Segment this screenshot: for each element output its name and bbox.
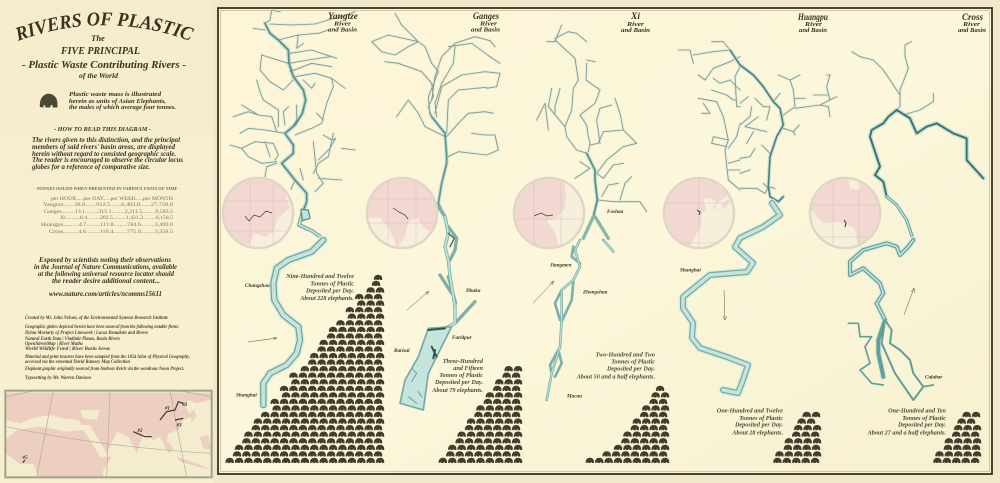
text block: source paper xyxy=(34,256,177,298)
text block: source paper: in the Journal of Nature Communications, available xyxy=(34,263,177,271)
text block: credits: Created by Mr. John Nelson, of the Environmental Systems Research Institute xyxy=(25,316,169,321)
river title: Ganges: and Basin xyxy=(471,26,501,34)
tonnage note: Cross xyxy=(867,408,947,436)
text block: how to read: The reader is encouraged to observe the circular locus xyxy=(32,157,183,164)
globe: Huangpu xyxy=(664,178,734,248)
river title: Cross: Cross xyxy=(962,13,983,23)
locator map: #4 xyxy=(181,403,187,408)
tonnage note: Cross: About 27 and a half elephants. xyxy=(867,430,946,436)
text block: credits: World Wildlife Fund | River Basin Areas xyxy=(25,347,110,352)
icon: elephant unit xyxy=(40,94,57,108)
globe: Xi xyxy=(514,178,584,248)
river title: Yangtze xyxy=(328,12,359,34)
river title: Yangtze: and Basin xyxy=(328,26,358,34)
river title: Xi xyxy=(621,12,651,34)
river title: Yangtze: Yangtze xyxy=(328,12,359,22)
river title: Huangpu: River xyxy=(804,21,823,28)
panel: river basins frame xyxy=(213,0,1000,483)
text block: credits: OpenStreetMap | River Maths xyxy=(25,342,83,347)
river title: Huangpu: Huangpu xyxy=(797,13,828,23)
title: RIVERS OF PLASTIC xyxy=(16,12,194,41)
text block: credits: Geographic globes depicted herein have been sourced from the following notable firms: xyxy=(25,325,179,330)
river: Yangtze xyxy=(230,10,355,405)
legend text: Plastic waste mass is illustrated xyxy=(69,91,162,98)
text block: credits: Elephant graphic originally sourced from Andreas Reich via the wondrous Noun Project. xyxy=(24,367,184,372)
city labels: Shanghai xyxy=(680,268,701,274)
river title: Ganges: Ganges xyxy=(473,12,499,22)
river: Cross xyxy=(848,42,983,400)
text block: credits: Natural Earth Data | Vladimir Plazas, Basin Rivers xyxy=(24,337,120,342)
text block: how to read: The rivers given to this distinction, and the principal xyxy=(32,137,180,144)
tonnage note: Yangtze: Deposited per Day. xyxy=(305,288,354,294)
river title: Xi: Xi xyxy=(630,12,640,22)
table: tonnes per unit of time: Huangpu..........4.7.........111.8.........784.6.........3,400.0 xyxy=(41,222,173,228)
city labels: Jiangmen xyxy=(549,262,571,268)
tonnage note: Ganges: Three-Hundred xyxy=(443,358,484,365)
legend text: herein as units of Asian Elephants, xyxy=(69,98,166,105)
table: tonnes per unit of time: Cross..........4.6.........110.4.........775.0.........3,358.5 xyxy=(49,229,173,235)
elephant pyramid: Huangpu xyxy=(773,412,821,463)
text block: how to read xyxy=(31,137,183,171)
tonnage note: Cross: Tonnes of Plastic xyxy=(902,415,946,422)
elephant pyramid: Ganges xyxy=(439,366,522,463)
tonnage note: Huangpu: Tonnes of Plastic xyxy=(739,415,783,422)
text block: credits: Dylan Moriarty of Project Linework | Lucas Beaudoin and Rivers xyxy=(24,331,148,336)
tonnage note: Huangpu: One-Hundred and Twelve xyxy=(717,408,783,414)
locator map: #2 xyxy=(136,429,143,434)
river title: Cross: and Basin xyxy=(958,27,987,34)
tonnage note: Ganges: Deposited per Day. xyxy=(434,379,483,386)
city labels: Foshan xyxy=(607,209,624,215)
subtitle: of the World xyxy=(79,72,119,80)
city labels: Calabar xyxy=(925,374,943,380)
subtitle xyxy=(22,33,186,80)
river title: Huangpu: and Basin xyxy=(799,27,828,34)
river title: Huangpu xyxy=(797,13,828,34)
callout and elephants: Cross xyxy=(867,408,981,463)
tonnage note: Ganges: Tonnes of Plastic xyxy=(439,372,483,379)
elephant pyramid: Cross xyxy=(933,412,981,463)
tonnage note: Xi: About 50 and a half elephants. xyxy=(576,374,655,380)
text block: source paper: at the following universal resource locator should xyxy=(38,270,174,278)
tonnage note: Huangpu: About 28 elephants. xyxy=(731,430,783,436)
elephant pyramid: Yangtze xyxy=(225,275,384,463)
tonnage note: Xi: Deposited per Day. xyxy=(606,366,655,372)
city labels xyxy=(236,209,943,400)
river title: Cross xyxy=(958,13,987,34)
river: Ganges xyxy=(372,13,500,410)
subtitle: FIVE PRINCIPAL xyxy=(60,46,140,57)
river: Xi xyxy=(537,25,647,400)
heading: how to read: - HOW TO READ THIS DIAGRAM - xyxy=(54,127,151,133)
legend text xyxy=(69,91,176,111)
text block: source paper: www.nature.com/articles/ncomms15611 xyxy=(49,289,162,298)
table: tonnes per unit of time: Xi..........8.4.........202.5.........1,421.2.........6,158.5 xyxy=(60,215,173,221)
callout and elephants: Huangpu xyxy=(717,408,821,463)
tonnage note: Xi: Tonnes of Plastic xyxy=(611,358,655,366)
text block: how to read: members of said rivers' basin areas, are displayed xyxy=(32,144,176,151)
city labels: Macau xyxy=(566,394,582,400)
text block: how to read: herein without regard to consisted geographic scale. xyxy=(32,151,176,158)
tonnage note: Huangpu: Deposited per Day. xyxy=(734,422,783,428)
tonnage note: Yangtze xyxy=(285,273,354,302)
tonnage note: Ganges xyxy=(431,358,484,394)
table: tonnes per unit of time: Yangtze.......38.0.......912.5.......6,403.8.......27,750.0 xyxy=(43,202,173,208)
locator map: #5 xyxy=(22,456,28,461)
river title: Ganges xyxy=(471,12,501,34)
legend text: the males of which average four tonnes. xyxy=(69,104,176,111)
text block: credits: accessed via the esteemed David Rumsey Map Collection xyxy=(25,360,130,365)
elephant pyramid: Xi xyxy=(586,386,669,463)
panel: title and reading guide xyxy=(0,12,213,483)
text block: source paper: the reader desire additional content... xyxy=(52,277,160,285)
river title: Ganges: River xyxy=(479,20,498,28)
city labels: Dhaka xyxy=(465,288,481,294)
river title: Cross: River xyxy=(962,21,981,28)
north arrows xyxy=(248,281,915,342)
city labels: Changzhou xyxy=(245,283,270,289)
locator map: #3 xyxy=(176,424,182,429)
globe: Cross xyxy=(810,178,880,248)
tonnage note: Cross: Deposited per Day. xyxy=(897,422,946,428)
river title: Xi: River xyxy=(626,21,645,28)
river title: Yangtze: River xyxy=(333,20,352,28)
tonnage note: Yangtze: About 228 elephants. xyxy=(299,295,354,302)
city labels: Shanghai xyxy=(236,392,257,398)
globe: Yangtze xyxy=(223,178,293,248)
subtitle: - Plastic Waste Contributing Rivers - xyxy=(22,59,186,71)
globe: Ganges xyxy=(367,178,437,248)
tonnage note: Xi: Two-Hundred and Two xyxy=(596,352,655,358)
heading: tonnes table: - TONNES ISSUED WHEN PRESENTED IN VARIOUS UNITS OF TIME - xyxy=(34,186,181,191)
text block: how to read: globes for a reference of comparative size. xyxy=(31,164,150,171)
text block: source paper: Exposed by scientists noting their observations xyxy=(38,256,171,264)
tonnage note: Yangtze: Tonnes of Plastic xyxy=(310,280,354,288)
locator map: #1 xyxy=(164,406,170,411)
river title: Xi: and Basin xyxy=(621,27,651,34)
table: tonnes per unit of time: per HOUR.....per DAY.....per WEEK.....per MONTH xyxy=(51,196,173,202)
tonnage note: Cross: One-Hundred and Ten xyxy=(888,408,947,414)
text block: credits: Material and print textures have been sampled from the 1854 Atlas of Physical Geography, xyxy=(24,355,190,360)
city labels: Zhongshan xyxy=(582,290,608,296)
callout and elephants: Yangtze xyxy=(225,273,384,463)
tonnage note: Yangtze: Nine-Hundred and Twelve xyxy=(285,273,354,280)
city labels: Faridpur xyxy=(452,335,473,341)
city labels: Barisal xyxy=(393,348,410,354)
table: tonnes per unit of time xyxy=(41,196,173,235)
tonnage note: Xi xyxy=(576,352,655,380)
tonnage note: Ganges: About 79 elephants. xyxy=(431,387,483,394)
text block: credits xyxy=(24,316,190,381)
tonnage note: Huangpu xyxy=(717,408,783,436)
subtitle: The xyxy=(91,33,105,43)
callout and elephants: Ganges xyxy=(431,358,522,463)
river: Huangpu xyxy=(678,42,837,393)
locator map xyxy=(5,385,212,477)
tonnage note: Ganges: and Fifteen xyxy=(453,365,484,372)
text block: credits: Typesetting by Mr. Warren Davison xyxy=(25,376,91,381)
table: tonnes per unit of time: Ganges.........13.1.........315.1.........2,211.5.........9,583.5 xyxy=(44,209,173,215)
callout and elephants: Xi xyxy=(576,352,669,463)
